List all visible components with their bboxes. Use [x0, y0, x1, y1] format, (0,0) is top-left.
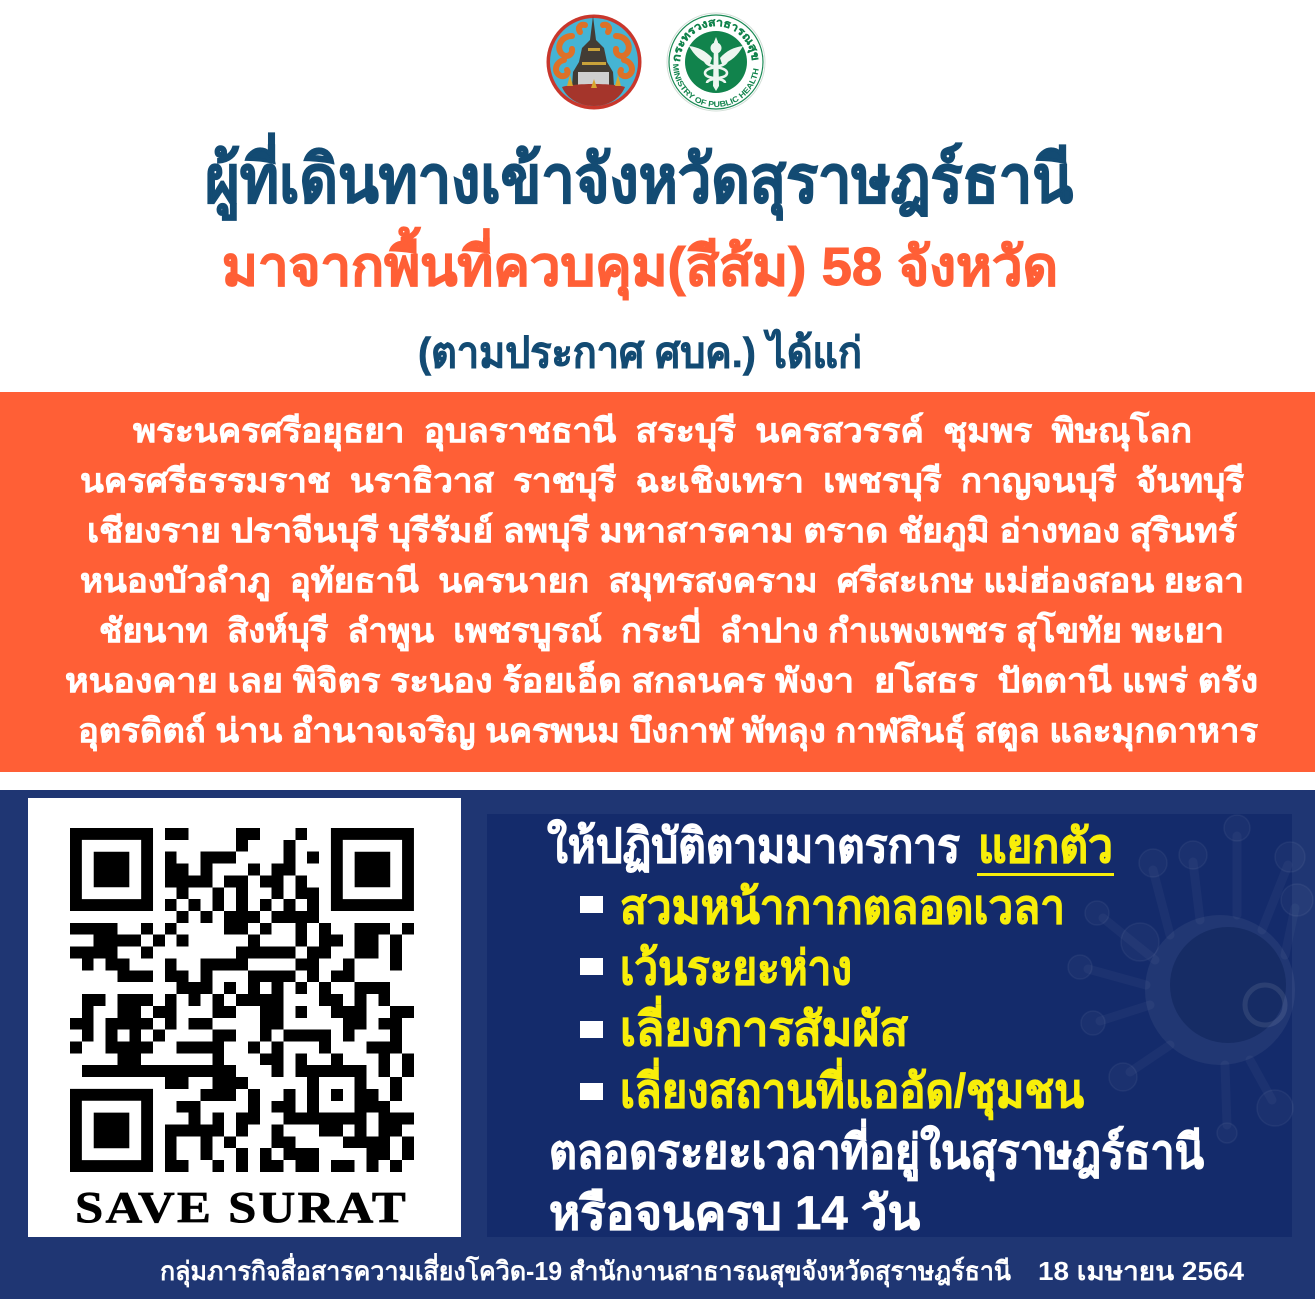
- footer credit: [160, 1252, 1245, 1288]
- logos: [546, 12, 766, 112]
- icon: Ministry of Public Health seal: กระทรวงสาธารณสุข: [674, 19, 758, 62]
- measure: keep distance: เว้นระยะห่าง: [620, 941, 852, 994]
- province line 7: อุตรดิตถ์ น่าน อำนาจเจริญ นครพนม บึงกาฬ พัทลุง กาฬสินธุ์ สตูล และมุกดาหาร: [78, 712, 1258, 752]
- icon: Ministry of Public Health seal: [666, 12, 766, 112]
- virus watermark: [1068, 815, 1313, 1143]
- province line 3: เชียงราย ปราจีนบุรี บุรีรัมย์ ลพบุรี มหาสารคาม ตราด ชัยภูมิ อ่างทอง สุรินทร์: [87, 512, 1237, 552]
- sub-heading: (ตามประกาศ ศบค.) ได้แก่: [418, 328, 862, 376]
- title: ผู้ที่เดินทางเข้าจังหวัดสุราษฎร์ธานี: [205, 132, 1073, 221]
- measure: avoid crowded places: เลี่ยงสถานที่แออัด/ชุมชน: [620, 1057, 1084, 1120]
- province line 1: พระนครศรีอยุธยา อุบลราชธานี สระบุรี นครสวรรค์ ชุมพร พิษณุโลก: [133, 411, 1192, 452]
- panel: QR code: [28, 798, 461, 1237]
- QR caption: SAVE SURAT: [75, 1183, 408, 1232]
- panel: province list: [0, 392, 1315, 772]
- province line 4: หนองบัวลำภู อุทัยธานี นครนายก สมุทรสงคราม ศรีสะเกษ แม่ฮ่องสอน ยะลา: [80, 562, 1244, 602]
- measure: avoid contact: เลี่ยงการสัมผัส: [620, 995, 908, 1055]
- measures heading: ให้ปฏิบัติตามมาตรการ: [547, 818, 960, 872]
- icon: Ministry of Public Health seal: MINISTRY OF PUBLIC HEALTH: [672, 64, 759, 107]
- panel: lower blue section: [0, 790, 1315, 1299]
- province line 2: นครศรีธรรมราช นราธิวาส ราชบุรี ฉะเชิงเทรา เพชรบุรี กาญจนบุรี จันทบุรี: [80, 462, 1244, 502]
- subtitle: มาจากพื้นที่ควบคุม(สีส้ม) 58 จังหวัด: [222, 227, 1058, 301]
- footer credit: กลุ่มภารกิจสื่อสารความเสี่ยงโควิด-19 สำนักงานสาธารณสุขจังหวัดสุราษฎร์ธานี: [160, 1252, 1011, 1288]
- duration line 2: หรือจนครบ 14 วัน: [549, 1186, 920, 1239]
- province line 5: ชัยนาท สิงห์บุรี ลำพูน เพชรบูรณ์ กระบี่ ลำปาง กำแพงเพชร สุโขทัย พะเยา: [99, 607, 1224, 652]
- footer credit: 18 เมษายน 2564: [1038, 1256, 1245, 1286]
- measure: wear a mask: สวมหน้ากากตลอดเวลา: [620, 880, 1065, 933]
- icon: Surat Thani provincial seal: [546, 14, 642, 110]
- QR code: [70, 828, 414, 1172]
- province line 6: หนองคาย เลย พิจิตร ระนอง ร้อยเอ็ด สกลนคร พังงา ยโสธร ปัตตานี แพร่ ตรัง: [65, 660, 1258, 699]
- panel: isolation measures: [547, 818, 1204, 1239]
- measures heading: แยกตัว: [978, 819, 1113, 872]
- duration line 1: ตลอดระยะเวลาที่อยู่ในสุราษฎร์ธานี: [549, 1118, 1204, 1182]
